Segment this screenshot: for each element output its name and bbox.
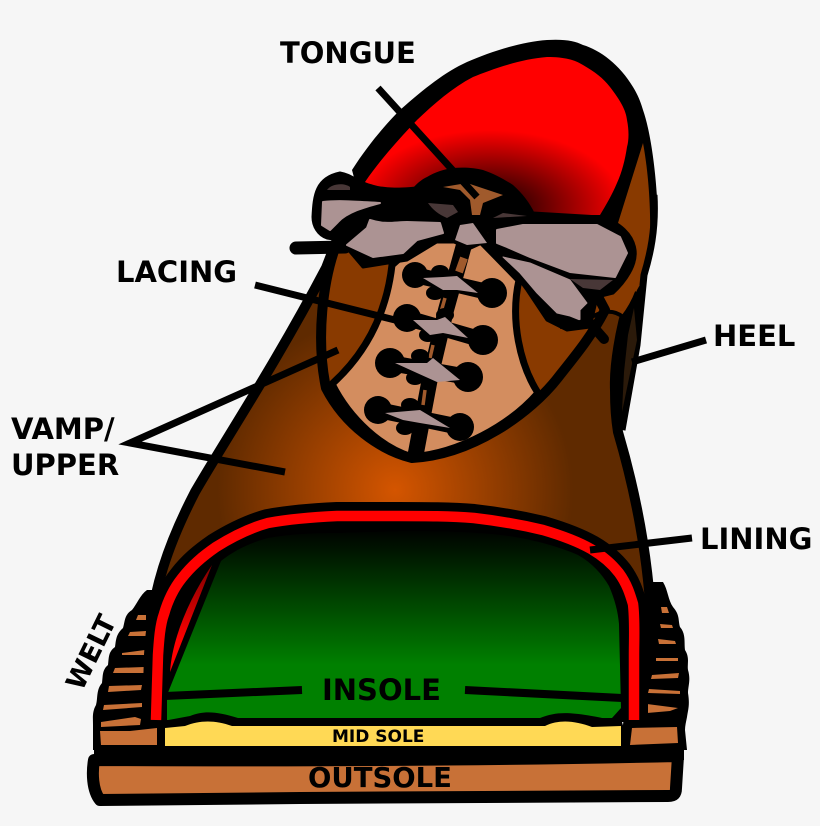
red inner side wedge (170, 565, 212, 672)
black band above outsole (94, 746, 684, 760)
leader line: tongue (378, 88, 477, 197)
label: vamp/upper: VAMP/ (11, 412, 115, 446)
label: tongue: TONGUE (280, 36, 416, 70)
label: mid sole: MID SOLE (332, 727, 424, 747)
label: heel: HEEL (713, 319, 795, 353)
label: lining: LINING (700, 522, 812, 556)
heel counter and outer heel edge (617, 195, 654, 430)
midsole (160, 712, 630, 750)
outsole (93, 756, 678, 800)
flat brown heel quarter (585, 143, 650, 318)
vamp eye-stay panels (321, 225, 605, 458)
label: welt: WELT (60, 610, 123, 695)
loose lace end (560, 292, 637, 327)
sole stack (93, 712, 684, 800)
insole: green footbed (167, 531, 621, 720)
label: vamp/upper: UPPER (11, 448, 119, 482)
leader line: lining (590, 538, 692, 550)
label: outsole: OUTSOLE (308, 762, 452, 794)
lacing: eyelets and crossing laces (364, 245, 507, 458)
lining and insole opening (156, 516, 634, 722)
tan lacing panel (332, 240, 538, 457)
leader line: lacing (255, 285, 395, 320)
leader lines: insole (165, 690, 622, 698)
upper: brown shoe body (150, 180, 652, 640)
label: insole: INSOLE (322, 673, 441, 707)
right bow (487, 213, 635, 330)
tongue: red interior (365, 57, 628, 215)
label: lacing: LACING (116, 255, 237, 289)
outer collar band (352, 40, 657, 318)
red lining band (156, 516, 634, 720)
welt right (620, 582, 689, 750)
leader lines: vamp/upper (130, 350, 338, 472)
lace bow (296, 173, 637, 339)
bow centre knot (450, 220, 492, 250)
top of tongue dome (408, 168, 535, 240)
leader line: heel (632, 340, 706, 362)
welt left (93, 590, 165, 750)
left bow (313, 173, 467, 267)
